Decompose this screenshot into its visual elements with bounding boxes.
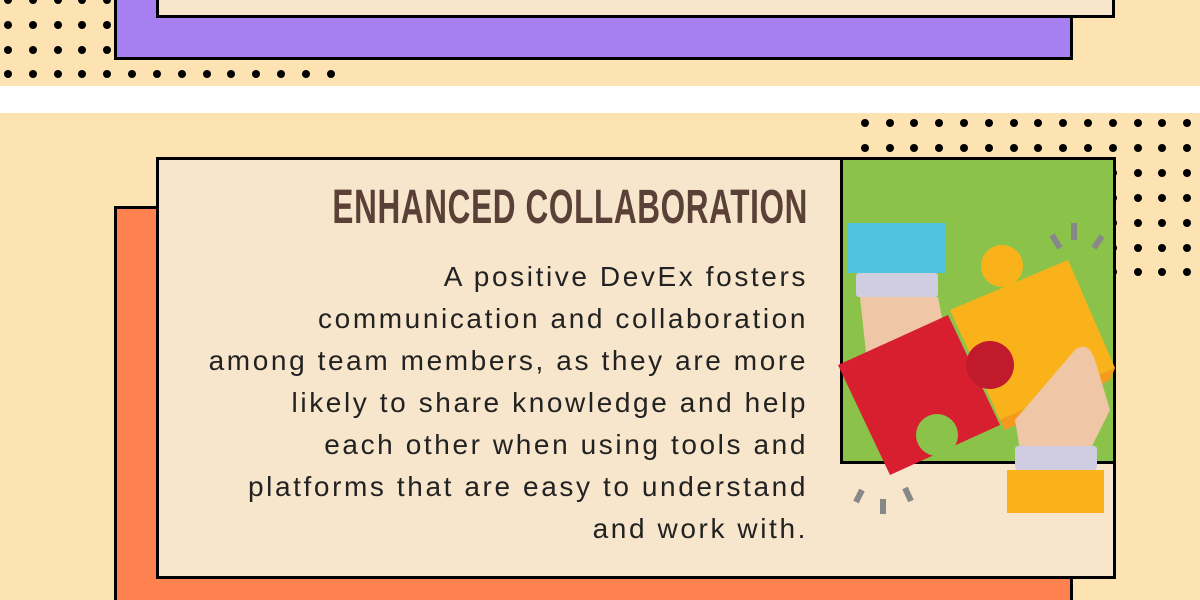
left hand [860, 297, 950, 400]
dots pattern top-left [4, 0, 335, 78]
purple backing panel (top) [114, 0, 1073, 60]
body text: platforms that are easy to understand [248, 471, 808, 502]
body text: each other when using tools and [324, 429, 808, 460]
right sleeve [1007, 446, 1104, 513]
body text: communication and collaboration [318, 303, 808, 334]
body text: and work with. [593, 513, 808, 544]
top card remnant [156, 0, 1115, 18]
body text: A positive DevEx fosters [444, 261, 808, 292]
right hand [1015, 347, 1110, 450]
illustration: hands with puzzle pieces [838, 223, 1115, 514]
body text [209, 261, 808, 544]
yellow piece [950, 245, 1115, 430]
spark marks [856, 223, 1102, 514]
green image box [840, 157, 1116, 464]
body text: among team members, as they are more [209, 345, 808, 376]
main card [156, 157, 1116, 579]
red piece [838, 315, 1014, 475]
title: ENHANCED COLLABORATION [332, 181, 808, 234]
dots pattern top-right of lower section [861, 119, 1191, 276]
left sleeve [848, 223, 945, 297]
body text: likely to share knowledge and help [292, 387, 808, 418]
top section background [0, 0, 1200, 86]
white band [0, 86, 1200, 113]
orange backing panel [114, 206, 1073, 600]
